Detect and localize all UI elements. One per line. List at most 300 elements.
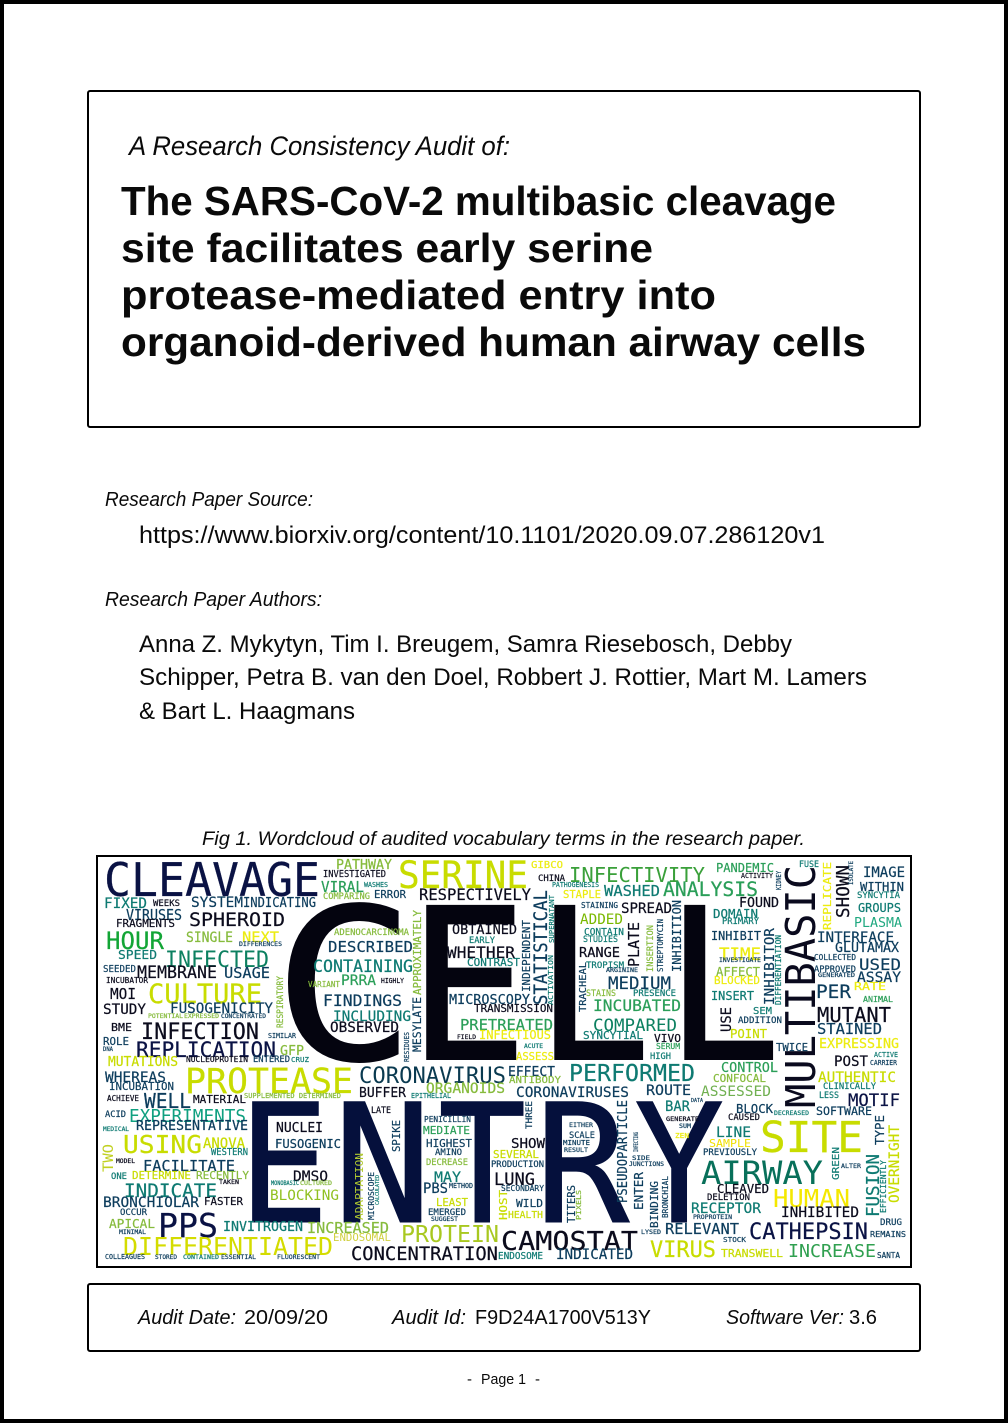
word cloud: OBSERVED: [330, 1020, 399, 1036]
word cloud: SPREAD: [621, 901, 672, 917]
audit date: 20/09/20: [244, 1307, 328, 1329]
word cloud: MESYLATE: [410, 997, 424, 1052]
word cloud: DELETION: [707, 1193, 750, 1203]
word cloud: BUFFER: [359, 1086, 406, 1101]
word: PROTEASE: PROTEASE: [185, 1062, 353, 1102]
page number: [467, 1371, 540, 1388]
word cloud: FUSOGENICITY: [170, 1001, 274, 1017]
word cloud: GLUTAMAX: [835, 941, 899, 956]
word cloud: INDEPENDENT: [520, 920, 533, 992]
word: SITE: SITE: [760, 1113, 863, 1163]
word cloud: CORONAVIRUSES: [516, 1085, 629, 1101]
panel: title box: [88, 91, 920, 427]
word: CELL: C: [273, 864, 416, 1109]
page number: -: [467, 1371, 472, 1388]
word cloud: INHIBITION: [670, 900, 684, 972]
word cloud: HEALTH: [508, 1210, 543, 1221]
word cloud: COMPARED: [593, 1016, 677, 1036]
word cloud: TWO: [101, 1144, 117, 1172]
word cloud: STAINED: [817, 1020, 882, 1038]
word cloud: EARLY: [469, 936, 496, 946]
word cloud: RELEVANT: [665, 1220, 739, 1238]
paper title: The SARS-CoV-2 multibasic cleavage: [121, 178, 836, 224]
paper title: organoid-derived human airway cells: [121, 319, 866, 365]
word cloud: SEEDED: [103, 964, 136, 975]
word cloud: VIRUSES: [126, 906, 182, 924]
panel: audit details footer: [88, 1284, 920, 1351]
word cloud: ERROR: [374, 889, 407, 901]
word cloud: HIGHEST: [426, 1137, 472, 1150]
audit id: Audit Id:: [391, 1307, 466, 1329]
word cloud: EITHER: [569, 1121, 593, 1129]
word cloud: EFFECT: [508, 1065, 555, 1080]
word cloud: CONTAIN: [584, 927, 624, 938]
word cloud: SOFTWARE: [816, 1104, 872, 1118]
word cloud: USAGE: [224, 964, 270, 982]
word cloud: MUTANT: [817, 1003, 891, 1027]
word cloud: INVESTIGATED: [323, 869, 386, 880]
word cloud: MEDIUM: [608, 974, 671, 994]
word cloud: THREE: [525, 1101, 535, 1129]
word: CELL: L: [665, 864, 781, 1109]
word cloud: VARIANT: [308, 980, 340, 989]
word cloud: MINIMAL: [119, 1229, 146, 1236]
word: AIRWAY: AIRWAY: [701, 1154, 823, 1192]
word cloud: STOCK: [723, 1236, 747, 1244]
word cloud: DECREASE: [426, 1158, 468, 1168]
word cloud: INFECTIVITY: [569, 863, 705, 887]
word cloud: ZEN: [675, 1132, 689, 1140]
word cloud: PRRA: [341, 973, 376, 989]
word cloud: RESPECTIVELY: [419, 885, 531, 904]
word cloud: RATE: [854, 980, 886, 993]
word cloud: PERFORMED: [569, 1061, 695, 1087]
word cloud: DIFFERENTIATION: [774, 935, 783, 1005]
word cloud: MUTATIONS: [108, 1055, 178, 1070]
word cloud: USE: [719, 1007, 735, 1032]
word cloud: DETERMINE: [132, 1170, 191, 1182]
word cloud: PATHWAY: [336, 858, 392, 873]
word cloud: GENERATED: [818, 972, 855, 979]
word cloud: FACILITATE: [143, 1157, 235, 1175]
word cloud: INCLUDING: [333, 1009, 411, 1025]
word cloud: MOTIF: [848, 1091, 900, 1111]
word cloud: ENDOSOMAL: [333, 1232, 391, 1244]
word cloud: POTENTIAL: [148, 1013, 183, 1020]
word cloud: PLASMA: [854, 916, 902, 931]
word cloud: WITHIN: [860, 879, 904, 894]
word cloud: ANIMAL: [863, 995, 893, 1004]
word cloud: DOMAIN: [713, 906, 758, 921]
word cloud: SPHEROID: [189, 909, 285, 931]
word cloud: CONTAINED: [183, 1253, 219, 1261]
word cloud: FOUND: [739, 896, 779, 911]
word cloud: SAMPLE: [709, 1137, 751, 1150]
word cloud: SCALE: [569, 1131, 595, 1141]
word cloud: GFP: [280, 1044, 304, 1059]
word cloud: PER: [816, 981, 852, 1003]
word cloud: ADDED: [580, 912, 623, 928]
word cloud: WHEREAS: [105, 1070, 166, 1086]
word cloud: RESPIRATORY: [276, 975, 286, 1028]
word cloud: CONTRAST: [467, 956, 520, 969]
word: CLEAVAGE: CLEAVAGE: [104, 853, 320, 907]
word cloud: INTERFACE: [817, 930, 894, 946]
authors label: Research Paper Authors:: [105, 588, 322, 611]
word cloud: CRUZ: [291, 1056, 309, 1064]
word cloud: CONCENTRATED: [221, 1013, 266, 1020]
word: ENTRY: N: [333, 1069, 432, 1261]
software version: Software Ver:: [726, 1307, 844, 1329]
word cloud: SYNCYTIAL: [583, 1029, 643, 1042]
word cloud: WELL: [144, 1089, 191, 1113]
word cloud: INFECTIOUS: [479, 1028, 551, 1042]
word cloud: SUGGEST: [431, 1216, 458, 1223]
audit id: F9D24A1700V513Y: [475, 1307, 651, 1329]
authors list: & Bart L. Haagmans: [139, 698, 355, 725]
word cloud: WASHED: [604, 882, 660, 900]
word cloud: MODEL: [116, 1158, 135, 1165]
word cloud: ACTIVITY: [741, 872, 774, 880]
word cloud: INFECTION: [141, 1020, 259, 1045]
word cloud: STUDIES: [583, 935, 618, 945]
word cloud: WEEKS: [153, 899, 180, 909]
word cloud: VIVO: [654, 1032, 681, 1045]
word cloud: SPIKE: [390, 1120, 403, 1152]
word cloud: COLLECTED: [814, 953, 856, 962]
word cloud: MEDICAL: [103, 1126, 129, 1133]
word cloud: PRESENCE: [633, 989, 676, 999]
word cloud: INHIBITOR: [763, 928, 778, 1005]
word cloud: INDICATING: [243, 895, 316, 911]
word cloud: DMSO: [293, 1169, 328, 1185]
word cloud: FLUORESCENT: [277, 1253, 320, 1261]
word cloud: ALTER: [841, 1163, 861, 1170]
audit id: [391, 1307, 651, 1329]
word cloud: EPITHELIAL: [411, 1092, 451, 1100]
word cloud: LESS: [819, 1091, 839, 1101]
word cloud: FUSE: [799, 860, 819, 870]
word cloud: PROPROTEIN: [693, 1213, 732, 1221]
word cloud: APPROVED: [814, 965, 856, 975]
word cloud: CONFOCAL: [713, 1072, 766, 1085]
word cloud: PBS: [423, 1181, 448, 1197]
word cloud: PPS: [158, 1206, 218, 1245]
word cloud: BRONCHIAL: [661, 1176, 670, 1218]
word cloud: LINE: [716, 1125, 751, 1141]
word: SERINE: SERINE: [398, 854, 528, 897]
word cloud: PATHOGENESIS: [552, 881, 599, 889]
word cloud: STUDY: [103, 1002, 147, 1018]
word: CELL: [273, 864, 781, 1109]
paper title: protease-mediated entry into: [121, 272, 716, 318]
word: CELL: L: [535, 864, 651, 1109]
word cloud: TAKEN: [219, 1179, 239, 1186]
word cloud: INVITROGEN: [223, 1220, 303, 1235]
word cloud: LYSED: [641, 1229, 661, 1236]
word cloud: PRETREATED: [460, 1016, 553, 1034]
word cloud: VIRAL: [321, 878, 364, 896]
word cloud: OVERNIGHT: [887, 1124, 903, 1203]
word cloud: CLINICALLY: [823, 1082, 877, 1092]
word cloud: BRONCHIOLAR: [103, 1195, 199, 1211]
word cloud: LEAST: [436, 1197, 469, 1209]
word cloud: RECENTLY: [196, 1169, 249, 1182]
word cloud: NEXT: [242, 930, 279, 946]
word cloud: ACUTE: [524, 1043, 543, 1050]
word cloud: OCCUR: [120, 1208, 148, 1218]
word cloud: EXPRESSING: [819, 1037, 899, 1052]
word cloud: SUM: [679, 1123, 691, 1130]
word cloud: CAMOSTAT: [501, 1227, 638, 1257]
word cloud: REPLICATE: [821, 862, 834, 930]
word cloud: ESSENTIAL: [221, 1253, 256, 1261]
word cloud: PANDEMIC: [716, 861, 774, 875]
word cloud: ASSAY: [857, 970, 902, 986]
word cloud: MICROSCOPY: [449, 992, 530, 1008]
word cloud: INCREASED: [307, 1219, 389, 1237]
word cloud: DESCRIBED: [328, 938, 413, 956]
word cloud: INHIBIT: [711, 929, 761, 943]
word cloud: NUCLEI: [276, 1121, 323, 1136]
word cloud: LUNG: [494, 1170, 535, 1190]
word cloud: INVESTIGATE: [719, 957, 761, 964]
word cloud: SEM: [753, 1006, 772, 1017]
word cloud: PIXELS: [575, 1190, 583, 1220]
word cloud: ACTIVE: [874, 1051, 898, 1059]
word cloud: TRANSMISSION: [474, 1002, 553, 1015]
word cloud: COLLEAGUES: [105, 1253, 145, 1261]
word: ENTRY: E: [238, 1069, 329, 1261]
authors list: Schipper, Petra B. van den Doel, Robbert J. Rottier, Mart M. Lamers: [139, 664, 867, 691]
word cloud: ENDOSOME: [498, 1251, 543, 1262]
word cloud: SYNCYTIA: [857, 891, 901, 901]
word cloud: MINUTE: [563, 1139, 590, 1147]
word cloud: HIGH: [650, 1052, 671, 1062]
word cloud: PREVIOUSLY: [703, 1148, 758, 1158]
word cloud: NUCLEOPROTEIN: [186, 1055, 248, 1064]
word cloud: HIGHLY: [381, 977, 405, 985]
word cloud: TRANSWELL: [721, 1247, 783, 1260]
word cloud: GIBCO: [531, 860, 563, 871]
word cloud: ACID: [105, 1110, 126, 1120]
audit date: Audit Date:: [137, 1307, 236, 1329]
source label: Research Paper Source:: [105, 488, 313, 511]
word cloud: TRACHEAL: [578, 962, 589, 1012]
word cloud: MATERIAL: [193, 1093, 246, 1106]
word cloud: EMERGED: [428, 1208, 466, 1218]
word cloud: MONOBASIC: [271, 1180, 299, 1187]
word cloud: INCUBATION: [109, 1080, 174, 1093]
audit date: [137, 1307, 328, 1329]
word cloud: CARRIER: [870, 1059, 898, 1067]
word cloud: STAPLE: [563, 889, 601, 901]
word cloud: SEVERAL: [493, 1149, 539, 1161]
software version: 3.6: [849, 1307, 877, 1329]
word cloud: ADAPTATION: [353, 1153, 366, 1220]
word cloud: [97, 853, 911, 1267]
word cloud: ONE: [111, 1172, 127, 1182]
word cloud: INCUBATED: [593, 996, 681, 1015]
word cloud: ACTIVATION: [547, 955, 555, 1005]
word cloud: MICROSCOPE: [367, 1172, 376, 1220]
word cloud: RESIDUES: [403, 1032, 411, 1062]
word cloud: DIFFERENCES: [239, 940, 282, 948]
word cloud: CULTURED: [300, 1180, 332, 1187]
word cloud: ASSESSED: [701, 1084, 771, 1100]
word: ENTRY: Y: [634, 1069, 724, 1261]
word cloud: CULTURE: [148, 979, 262, 1010]
word cloud: BINDING: [648, 1181, 661, 1228]
word cloud: AFFECT: [716, 965, 760, 979]
word cloud: SYSTEM: [191, 895, 243, 911]
word cloud: CONTAINING: [313, 957, 413, 977]
word cloud: FRAGMENTS: [116, 918, 175, 930]
word cloud: PRODUCTION: [491, 1160, 544, 1170]
word cloud: INDICATED: [556, 1247, 633, 1263]
word cloud: ACHIEVE: [107, 1094, 139, 1103]
word cloud: INFECTING: [633, 1132, 640, 1152]
word cloud: DECREASED: [774, 1109, 809, 1117]
word cloud: ANOVA: [203, 1136, 246, 1152]
word cloud: GENERATE: [666, 1116, 699, 1123]
word cloud: SHOWN: [833, 865, 854, 918]
word cloud: SPEED: [118, 948, 157, 962]
word: ENTRY: R: [535, 1069, 630, 1261]
word cloud: GREEN: [831, 1147, 842, 1180]
word cloud: STREPTOMYCIN: [656, 919, 665, 972]
word cloud: EXPRESSED: [184, 1013, 219, 1020]
word: CELL: E: [408, 864, 528, 1109]
word cloud: ENTER: [632, 1171, 646, 1210]
word cloud: SUPERNATANT: [548, 894, 556, 943]
word cloud: APPROXIMATELY: [411, 910, 424, 995]
word cloud: ORGANOIDS: [426, 1081, 505, 1097]
word cloud: BLOCK: [736, 1102, 774, 1116]
word cloud: USING: [123, 1130, 202, 1159]
word cloud: SIMILAR: [268, 1032, 297, 1040]
word cloud: WILD: [516, 1197, 543, 1210]
word cloud: CAUSED: [728, 1113, 760, 1123]
word cloud: AMINO: [435, 1148, 462, 1158]
word cloud: ADDITION: [738, 1016, 782, 1026]
word cloud: COMPARING: [323, 892, 370, 902]
word cloud: CATHEPSIN: [749, 1220, 868, 1245]
word cloud: BME: [111, 1021, 132, 1034]
word cloud: CORONAVIRUS: [359, 1064, 506, 1089]
word cloud: CONCENTRATION: [351, 1243, 498, 1265]
word cloud: WESTERN: [211, 1147, 248, 1158]
word cloud: TWICE: [776, 1041, 808, 1054]
word cloud: RECEPTOR: [691, 1201, 761, 1217]
word cloud: ANALYSIS: [663, 878, 758, 901]
word cloud: SIDE: [632, 1155, 650, 1162]
word cloud: MEDIATE: [423, 1124, 470, 1137]
word cloud: DIFFERENTIATED: [123, 1232, 333, 1261]
word cloud: SHOW: [511, 1137, 545, 1152]
word cloud: CHINA: [538, 874, 566, 884]
word cloud: INFECTED: [165, 948, 269, 973]
word cloud: PLATE: [625, 922, 643, 967]
word cloud: AUTHENTIC: [818, 1070, 896, 1086]
word cloud: STATISTICAL: [530, 890, 552, 1005]
word: ENTRY: T: [438, 1069, 526, 1261]
word cloud: CALCULATED: [375, 1175, 381, 1205]
word cloud: INSERT: [711, 989, 754, 1003]
audit subtitle: A Research Consistency Audit of:: [127, 131, 510, 161]
word cloud: LATE: [371, 1106, 391, 1116]
word cloud: HUMAN: [773, 1184, 850, 1213]
word cloud: INCUBATOR: [106, 976, 148, 985]
word cloud: FASTER: [204, 1195, 243, 1208]
word cloud: WHETHER: [447, 943, 515, 962]
word cloud: STAINS: [586, 989, 616, 999]
word cloud: CONTROL: [721, 1060, 778, 1076]
word cloud: EXPERIMENTS: [129, 1106, 246, 1127]
paper title: [121, 178, 866, 365]
word cloud: HOUR: [106, 927, 165, 955]
word cloud: MAY: [434, 1170, 462, 1186]
word cloud: CLEAVED: [717, 1181, 769, 1196]
word cloud: ROUTE: [646, 1083, 691, 1099]
word cloud: INHIBITED: [781, 1205, 859, 1221]
word cloud: BLOCKED: [714, 974, 760, 987]
word cloud: PROTEIN: [401, 1222, 499, 1248]
word cloud: ISOLATE: [848, 861, 855, 885]
word cloud: HOST: [497, 1190, 510, 1220]
word cloud: FUSOGENIC: [275, 1137, 341, 1151]
word cloud: SUPPLEMENTED DETERMINED: [244, 1092, 341, 1100]
word cloud: FIELD: [457, 1034, 476, 1041]
word cloud: STAINING: [581, 901, 618, 910]
word cloud: TROPISM: [586, 961, 625, 971]
word cloud: BAR: [665, 1099, 691, 1115]
word cloud: REPLICATION: [136, 1038, 276, 1062]
word cloud: PRIMARY: [722, 917, 760, 927]
word cloud: JUNCTIONS: [629, 1161, 664, 1168]
word cloud: SANTA: [877, 1251, 900, 1260]
word cloud: MOI: [110, 985, 136, 1003]
source url: https://www.biorxiv.org/content/10.1101/2020.09.07.286120v1: [139, 522, 825, 549]
word cloud: PSEUDOPARTICLE: [616, 1100, 631, 1203]
word cloud: PENICILLIN: [424, 1115, 471, 1124]
word cloud: DRUG: [880, 1218, 902, 1228]
authors list: Anna Z. Mykytyn, Tim I. Breugem, Samra Riesebosch, Debby: [139, 631, 792, 658]
word cloud: SERUM: [656, 1042, 680, 1051]
word cloud: ANTIBODY: [509, 1075, 561, 1086]
word cloud: METHOD: [449, 1182, 473, 1190]
word cloud: OBTAINED: [452, 922, 517, 938]
word cloud: ASSESS: [516, 1051, 554, 1063]
word cloud: TYPE: [873, 1115, 887, 1145]
word cloud: USED: [859, 955, 901, 974]
word cloud: INDICATE: [124, 1180, 217, 1202]
word cloud: EFFICIENTLY: [879, 1160, 888, 1213]
word cloud: ARGININE: [606, 967, 638, 974]
word cloud: ENTERED: [253, 1055, 290, 1065]
page number: -: [535, 1371, 540, 1388]
word cloud: ADENOCARCINOMA: [334, 928, 410, 938]
word cloud: GROUPS: [858, 901, 901, 915]
figure caption: Fig 1. Wordcloud of audited vocabulary terms in the research paper.: [202, 828, 805, 850]
word cloud: MEMBRANE: [137, 963, 217, 983]
word cloud: KIDNEY: [775, 870, 783, 890]
authors list: [139, 631, 867, 725]
word cloud: POST: [834, 1054, 869, 1070]
word cloud: REMAINS: [870, 1230, 906, 1239]
word cloud: ROLE: [103, 1036, 129, 1048]
word cloud: FIXED: [104, 896, 147, 912]
